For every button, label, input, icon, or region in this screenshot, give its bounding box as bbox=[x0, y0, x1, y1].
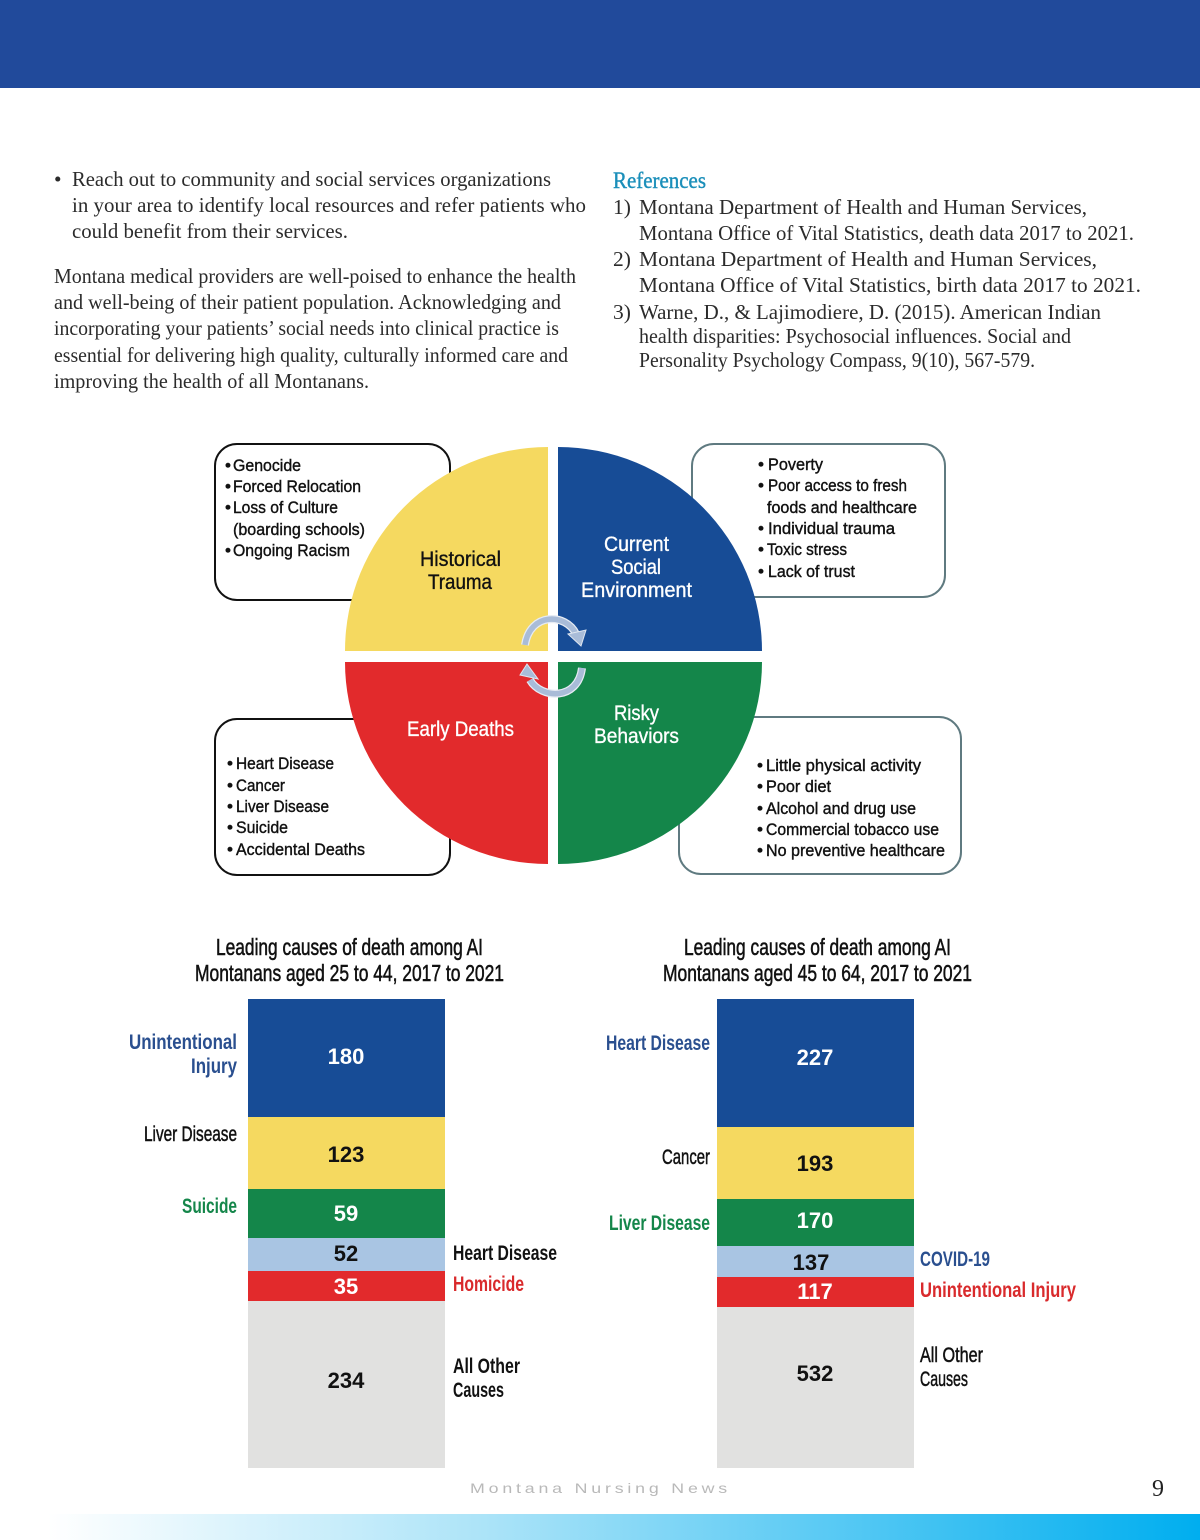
chart: ages 45 to 64 stacked bar: 532 bbox=[797, 1361, 833, 1386]
labels: ages 45 to 64: Causes bbox=[920, 1368, 968, 1391]
chart: ages 25 to 44 stacked bar: 52 bbox=[334, 1241, 358, 1266]
labels: ages 45 to 64: Liver Disease bbox=[609, 1212, 710, 1235]
quadrant: historical trauma bbox=[345, 447, 548, 651]
references: Montana Department of Health and Human Services, bbox=[639, 195, 1087, 219]
references: 1) bbox=[613, 195, 631, 219]
chart title: ages 45 to 64: Montanans aged 45 to 64, 2017 to 2021 bbox=[663, 960, 972, 986]
references bbox=[613, 168, 1141, 372]
chart title: ages 25 to 44: Leading causes of death among AI bbox=[216, 934, 483, 960]
panel: current social environment list: Toxic stress bbox=[767, 540, 847, 559]
panel: risky behaviors list: • bbox=[757, 777, 763, 796]
labels: ages 25 to 44: Causes bbox=[453, 1379, 504, 1402]
chart: ages 25 to 44 stacked bar: 35 bbox=[334, 1274, 358, 1299]
references: Warne, D., & Lajimodiere, D. (2015). American Indian bbox=[639, 300, 1101, 324]
text block: closing recommendation: and well-being of their patient population. Acknowledging and bbox=[54, 290, 561, 314]
labels: ages 25 to 44 bbox=[129, 1031, 557, 1402]
labels: ages 25 to 44: Homicide bbox=[453, 1273, 524, 1296]
references: Montana Department of Health and Human Services, bbox=[639, 247, 1097, 271]
panel: risky behaviors list bbox=[679, 717, 961, 874]
panel: current social environment list: Individual trauma bbox=[768, 519, 896, 538]
chart: ages 25 to 44 stacked bar bbox=[248, 999, 445, 1468]
labels: ages 25 to 44: Unintentional bbox=[129, 1031, 237, 1054]
panel: risky behaviors list: • bbox=[757, 799, 763, 818]
chart: ages 25 to 44 stacked bar: 123 bbox=[328, 1142, 364, 1167]
labels: ages 25 to 44: Suicide bbox=[182, 1195, 237, 1218]
references: health disparities: Psychosocial influences. Social and bbox=[639, 324, 1071, 348]
references: Montana Office of Vital Statistics, death data 2017 to 2021. bbox=[639, 221, 1134, 245]
panel: historical trauma list: (boarding schools) bbox=[233, 520, 365, 539]
arrow: clockwise upper bbox=[525, 619, 586, 646]
panel: current social environment list bbox=[692, 444, 945, 597]
labels: ages 25 to 44: Injury bbox=[191, 1055, 237, 1078]
labels: ages 45 to 64: COVID-19 bbox=[920, 1248, 990, 1271]
panel: risky behaviors list: Commercial tobacco use bbox=[766, 820, 939, 839]
text block: closing recommendation: could benefit from their services. bbox=[72, 219, 348, 243]
panel: current social environment list: Lack of trust bbox=[768, 562, 855, 581]
panel: historical trauma list: Loss of Culture bbox=[233, 498, 338, 517]
quadrant: early deaths: Early Deaths bbox=[407, 718, 514, 741]
chart: ages 45 to 64 stacked bar: 117 bbox=[797, 1279, 833, 1304]
panel: historical trauma list: Genocide bbox=[233, 456, 301, 475]
panel: risky behaviors list: • bbox=[757, 756, 763, 775]
chart title: ages 45 to 64: Leading causes of death among AI bbox=[684, 934, 951, 960]
panel: current social environment list: Poverty bbox=[768, 455, 823, 474]
header band bbox=[0, 0, 1200, 88]
panel: early deaths list: Suicide bbox=[236, 818, 288, 837]
panel: current social environment list: • bbox=[758, 455, 764, 474]
panel: risky behaviors list: Poor diet bbox=[766, 777, 831, 796]
labels: ages 45 to 64: Cancer bbox=[662, 1146, 710, 1169]
chart title: ages 45 to 64 bbox=[663, 934, 972, 986]
labels: ages 25 to 44: Liver Disease bbox=[144, 1123, 237, 1146]
quadrant: historical trauma: Historical bbox=[420, 548, 501, 571]
panel: early deaths list: Liver Disease bbox=[236, 797, 329, 816]
text block: closing recommendation: • bbox=[54, 167, 62, 191]
footer gradient band bbox=[0, 1514, 1200, 1540]
panel: early deaths list: • bbox=[227, 840, 233, 859]
panel: historical trauma list bbox=[215, 444, 450, 600]
references heading: References bbox=[613, 168, 706, 193]
panel: risky behaviors list: Little physical activity bbox=[766, 756, 921, 775]
labels: ages 25 to 44: Heart Disease bbox=[453, 1242, 557, 1265]
panel: current social environment list: • bbox=[758, 476, 764, 495]
panel: current social environment list: • bbox=[758, 519, 764, 538]
panel: historical trauma list: Ongoing Racism bbox=[233, 541, 350, 560]
labels: ages 45 to 64 bbox=[606, 1032, 1076, 1391]
panel: historical trauma list: • bbox=[225, 456, 231, 475]
panel: historical trauma list: • bbox=[225, 477, 231, 496]
labels: ages 45 to 64: Unintentional Injury bbox=[920, 1279, 1076, 1302]
chart title: ages 25 to 44: Montanans aged 25 to 44, 2017 to 2021 bbox=[195, 960, 504, 986]
text block: closing recommendation bbox=[54, 167, 586, 393]
panel: risky behaviors list: • bbox=[757, 841, 763, 860]
text block: closing recommendation: incorporating your patients’ social needs into clinical practice is bbox=[54, 316, 559, 340]
text block: closing recommendation: Montana medical providers are well-poised to enhance the health bbox=[54, 264, 576, 288]
quadrant: risky behaviors bbox=[558, 662, 762, 864]
text block: closing recommendation: improving the health of all Montanans. bbox=[54, 369, 369, 393]
panel: early deaths list: Cancer bbox=[236, 776, 285, 795]
references: Personality Psychology Compass, 9(10), 567-579. bbox=[639, 348, 1035, 372]
arrow: clockwise lower bbox=[520, 664, 582, 694]
quadrant: risky behaviors: Risky bbox=[614, 702, 659, 725]
panel: early deaths list: Heart Disease bbox=[236, 754, 334, 773]
panel: risky behaviors list: • bbox=[757, 820, 763, 839]
chart: ages 25 to 44 stacked bar: 59 bbox=[334, 1201, 358, 1226]
text block: closing recommendation: Reach out to community and social services organizations bbox=[72, 167, 551, 191]
chart: ages 45 to 64 stacked bar: 227 bbox=[797, 1045, 833, 1070]
panel: early deaths list: Accidental Deaths bbox=[236, 840, 365, 859]
quadrant: current social environment: Environment bbox=[581, 579, 692, 602]
panel: early deaths list: • bbox=[227, 797, 233, 816]
panel: current social environment list: • bbox=[758, 562, 764, 581]
references: Montana Office of Vital Statistics, birth data 2017 to 2021. bbox=[639, 273, 1141, 297]
quadrant: early deaths bbox=[345, 662, 548, 864]
chart: ages 45 to 64 stacked bar: 137 bbox=[793, 1250, 829, 1275]
chart: ages 25 to 44 stacked bar: 234 bbox=[328, 1368, 365, 1393]
quadrant: historical trauma: Trauma bbox=[428, 571, 492, 594]
chart: ages 45 to 64 stacked bar bbox=[717, 999, 914, 1468]
references: 3) bbox=[613, 300, 631, 324]
panel: early deaths list: • bbox=[227, 818, 233, 837]
page number: 9 bbox=[1152, 1476, 1164, 1502]
chart: ages 45 to 64 stacked bar: 193 bbox=[797, 1151, 833, 1176]
panel: current social environment list: foods and healthcare bbox=[767, 498, 917, 517]
labels: ages 45 to 64: Heart Disease bbox=[606, 1032, 710, 1055]
labels: ages 25 to 44: All Other bbox=[453, 1355, 520, 1378]
panel: early deaths list: • bbox=[227, 776, 233, 795]
text block: closing recommendation: essential for delivering high quality, culturally informed care and bbox=[54, 343, 568, 367]
quadrant: current social environment: Social bbox=[611, 556, 661, 579]
panel: risky behaviors list: No preventive healthcare bbox=[766, 841, 945, 860]
panel: early deaths list bbox=[215, 719, 450, 875]
chart: ages 25 to 44 stacked bar: 180 bbox=[328, 1044, 364, 1069]
panel: historical trauma list: • bbox=[225, 541, 231, 560]
quadrant: risky behaviors: Behaviors bbox=[594, 725, 679, 748]
quadrant: current social environment: Current bbox=[604, 533, 669, 556]
labels: ages 45 to 64: All Other bbox=[920, 1344, 983, 1367]
text block: closing recommendation: in your area to identify local resources and refer patients who bbox=[72, 193, 586, 217]
references: 2) bbox=[613, 247, 631, 271]
chart: ages 45 to 64 stacked bar: 170 bbox=[797, 1208, 833, 1233]
panel: historical trauma list: • bbox=[225, 498, 231, 517]
panel: historical trauma list: Forced Relocation bbox=[233, 477, 361, 496]
quadrant: current social environment bbox=[558, 447, 762, 651]
panel: risky behaviors list: Alcohol and drug use bbox=[766, 799, 916, 818]
panel: early deaths list: • bbox=[227, 754, 233, 773]
panel: current social environment list: Poor access to fresh bbox=[768, 476, 907, 495]
panel: current social environment list: • bbox=[758, 540, 764, 559]
chart title: ages 25 to 44 bbox=[195, 934, 504, 986]
footer publication name: Montana Nursing News bbox=[470, 1480, 731, 1496]
